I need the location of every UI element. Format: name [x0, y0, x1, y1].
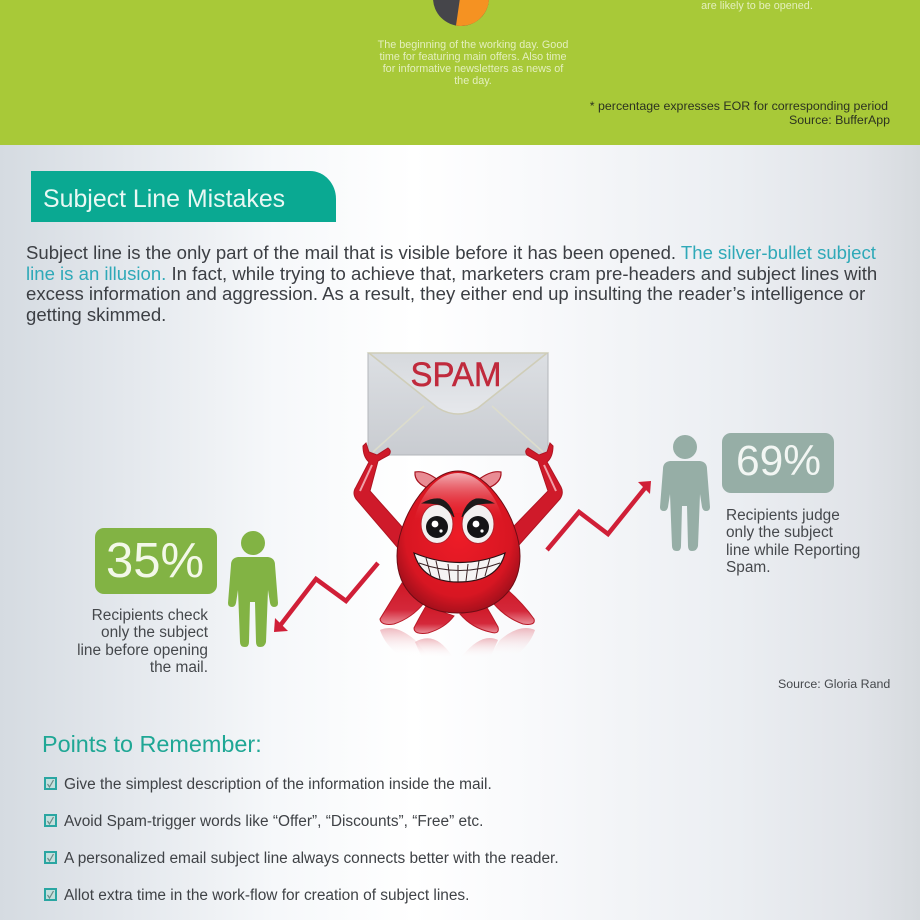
- text: source note: * percentage expresses EOR for corresponding period: [590, 99, 888, 113]
- eyes: [421, 504, 494, 544]
- text: 35% description: Recipients check: [92, 607, 208, 624]
- text: source note: Source: BufferApp: [789, 113, 890, 127]
- text: morning send time description: [378, 39, 568, 87]
- icon: gray person: [660, 435, 710, 551]
- heading: Points to Remember: Points to Remember:: [42, 731, 262, 757]
- text: intro paragraph: [26, 242, 877, 325]
- stat badge: 35%: [95, 528, 217, 594]
- text: 69% description: Spam.: [726, 559, 770, 576]
- arrow: red zigzag down-left: [274, 562, 380, 632]
- text: 35% description: line before opening: [77, 642, 208, 659]
- body: [397, 471, 520, 613]
- heading: Subject Line Mistakes: [31, 171, 336, 222]
- grin: [414, 553, 505, 582]
- text: 35% description: [77, 607, 208, 676]
- text: point 1: Give the simplest description of the information inside the mail.: [64, 776, 492, 793]
- text: 35% description: the mail.: [150, 659, 208, 676]
- forehead shine: [414, 473, 503, 522]
- text: 35% description: only the subject: [101, 624, 208, 641]
- text: morning send time description: time for featuring main offers. Also time: [379, 51, 567, 63]
- eyebrows: [423, 499, 493, 517]
- text: top right caption: are likely to be opened.: [701, 0, 813, 12]
- text: point 3: A personalized email subject line always connects better with the reader.: [64, 850, 559, 867]
- horns: [415, 472, 501, 489]
- envelope label: SPAM: SPAM: [410, 356, 502, 394]
- arrow: red zigzag up-right: [545, 481, 651, 552]
- text: source note: [590, 99, 890, 127]
- illustration: spam devil holding envelope: [354, 352, 563, 652]
- text: intro paragraph: getting skimmed.: [26, 304, 166, 325]
- text: 69% description: [726, 507, 860, 576]
- panel: green header band: [0, 0, 920, 145]
- text: intro paragraph: excess information and aggression. As a result, they either end up insulting the reader’s intelligence or: [26, 283, 865, 304]
- text: intro paragraph: Subject line is the only part of the mail that is visible before it has been opened. The silver-bullet subject: [26, 242, 876, 263]
- text: 69% description: Recipients judge: [726, 507, 840, 524]
- text: morning send time description: The beginning of the working day. Good: [378, 39, 568, 51]
- feet: [380, 583, 534, 633]
- icon: green person: [228, 531, 278, 647]
- text: morning send time description: for informative newsletters as news of: [383, 63, 563, 75]
- icon: checkbox 4: [44, 888, 57, 901]
- list: points to remember: [44, 776, 559, 904]
- icon: checkbox 3: [44, 851, 57, 864]
- heading: Subject Line Mistakes: Subject Line Mistakes: [43, 185, 285, 213]
- stat badge: 69%: 69%: [736, 438, 821, 485]
- envelope: [368, 353, 548, 455]
- stat badge: 69%: [722, 433, 834, 493]
- arms: [354, 443, 562, 548]
- text: source Gloria Rand: Source: Gloria Rand: [778, 677, 890, 691]
- stat badge: 35%: 35%: [106, 534, 204, 588]
- reflection: [380, 628, 535, 658]
- icon: checkbox 2: [44, 814, 57, 827]
- text: point 4: Allot extra time in the work-flow for creation of subject lines.: [64, 887, 469, 904]
- text: morning send time description: the day.: [454, 75, 492, 87]
- text: 69% description: only the subject: [726, 524, 833, 541]
- icon: checkbox 1: [44, 777, 57, 790]
- text: intro paragraph: line is an illusion. In fact, while trying to achieve that, marketers cram pre-headers and subject lines with: [26, 263, 877, 284]
- text: point 2: Avoid Spam-trigger words like “Offer”, “Discounts”, “Free” etc.: [64, 813, 483, 830]
- icon: pie chart: [433, 0, 489, 26]
- text: 69% description: line while Reporting: [726, 542, 860, 559]
